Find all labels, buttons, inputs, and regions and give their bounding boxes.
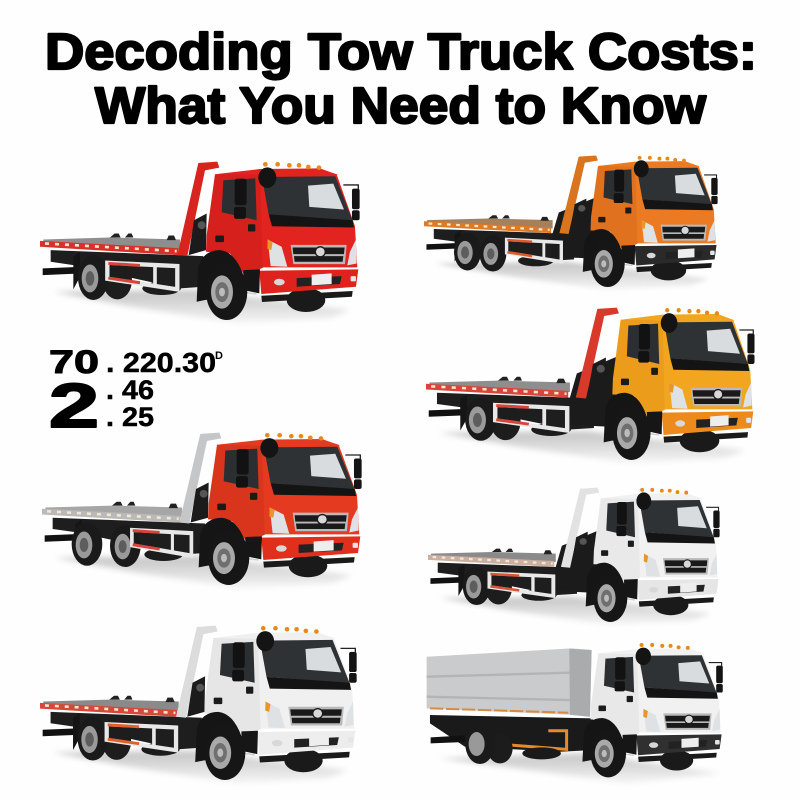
cargo box bbox=[427, 648, 592, 717]
truck: yellow flatbed bbox=[426, 308, 755, 463]
box chassis bbox=[430, 715, 593, 752]
number: 2: 2 bbox=[49, 372, 99, 441]
truck: white flatbed bbox=[428, 488, 720, 625]
number: 46: . 46 bbox=[106, 375, 154, 405]
number: 220.30: . 220.30 bbox=[106, 347, 216, 378]
title: Decoding Tow Truck Costs: bbox=[45, 23, 757, 80]
title: What You Need to Know bbox=[95, 77, 706, 134]
cab bbox=[582, 645, 723, 777]
pricing numbers bbox=[49, 344, 223, 441]
number: 70: 70 bbox=[49, 344, 99, 380]
number: 25: . 25 bbox=[106, 402, 154, 432]
truck: white flatbed with red rail bbox=[40, 626, 357, 783]
truck: white box truck bbox=[427, 645, 723, 783]
title bbox=[45, 23, 757, 134]
truck: red-orange flatbed with silver deck bbox=[42, 433, 362, 588]
ground shadow bbox=[440, 753, 720, 783]
truck: red flatbed bbox=[40, 162, 360, 323]
superscript mark: D bbox=[215, 350, 223, 362]
rear wheels bbox=[522, 747, 561, 759]
truck: orange flatbed bbox=[424, 156, 718, 290]
